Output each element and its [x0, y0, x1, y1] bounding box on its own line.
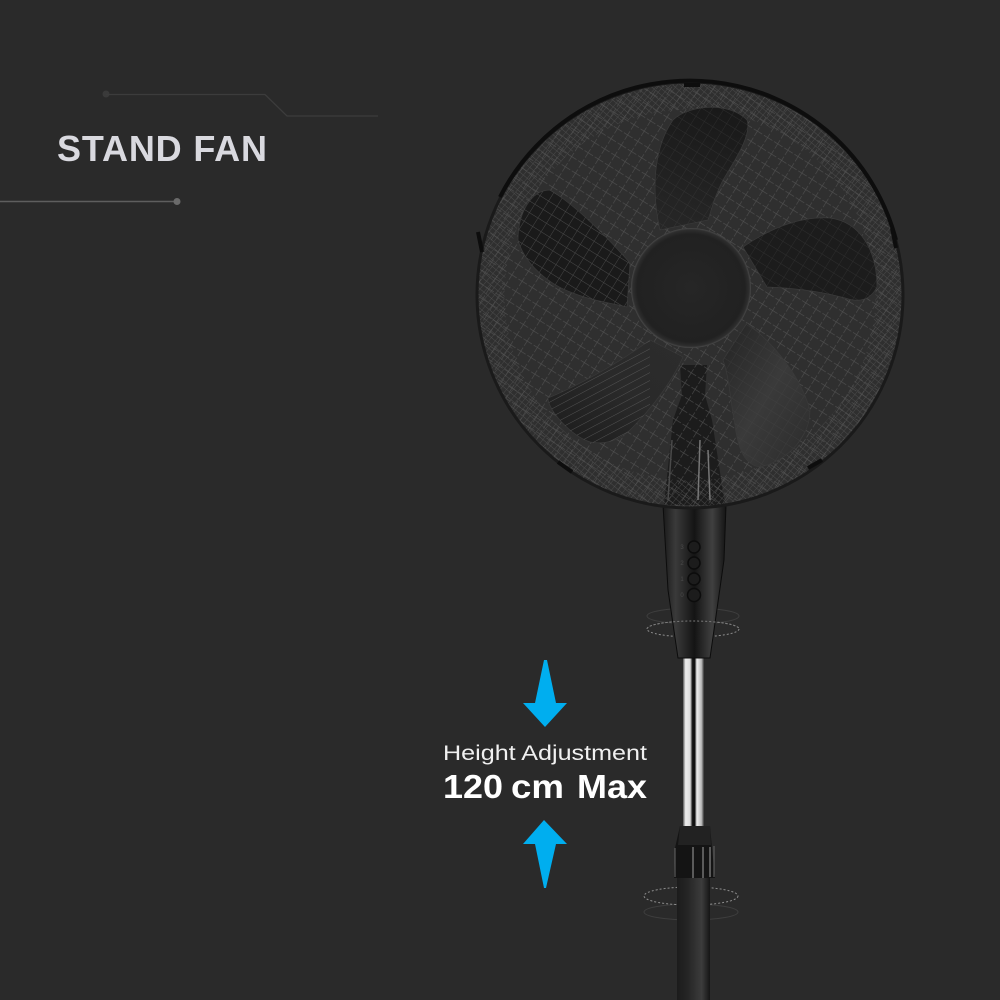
- blades: [518, 107, 877, 467]
- grill neck seen through mesh: [664, 365, 725, 505]
- height value: cm: [511, 768, 564, 805]
- decorative circuit line: bottom: [0, 198, 180, 205]
- height label: Height Adjustment: [443, 742, 647, 765]
- speed numbers: 1: [680, 577, 684, 583]
- speed numbers: [680, 545, 684, 599]
- speed numbers: 0: [680, 593, 684, 599]
- mesh: [478, 83, 902, 507]
- title: STAND FAN: [57, 128, 267, 169]
- speed buttons: [688, 541, 700, 602]
- neck highlights: [668, 440, 710, 500]
- outer rim: [477, 81, 903, 508]
- height value: Max: [577, 768, 648, 805]
- speed numbers: 3: [680, 545, 684, 551]
- height lock collar: [674, 826, 715, 878]
- speed numbers: 2: [680, 561, 684, 567]
- arrow: down: [523, 660, 567, 727]
- height value: 120: [443, 768, 503, 805]
- fan product illustration: [477, 81, 903, 1000]
- chrome telescopic pole: [683, 658, 704, 830]
- hub: [631, 228, 751, 348]
- height value: [443, 768, 648, 805]
- mesh over blades: [518, 108, 876, 464]
- arrow: up: [523, 820, 567, 888]
- motor neck and control housing: [663, 505, 726, 658]
- decorative circuit line: top: [102, 90, 378, 116]
- rotation indicator: housing, front arc: [647, 621, 739, 629]
- grill disk: [477, 82, 903, 508]
- rotation indicator: pole: [644, 887, 738, 920]
- lower pole: [677, 878, 710, 1000]
- rotation indicator: housing, back: [647, 608, 739, 637]
